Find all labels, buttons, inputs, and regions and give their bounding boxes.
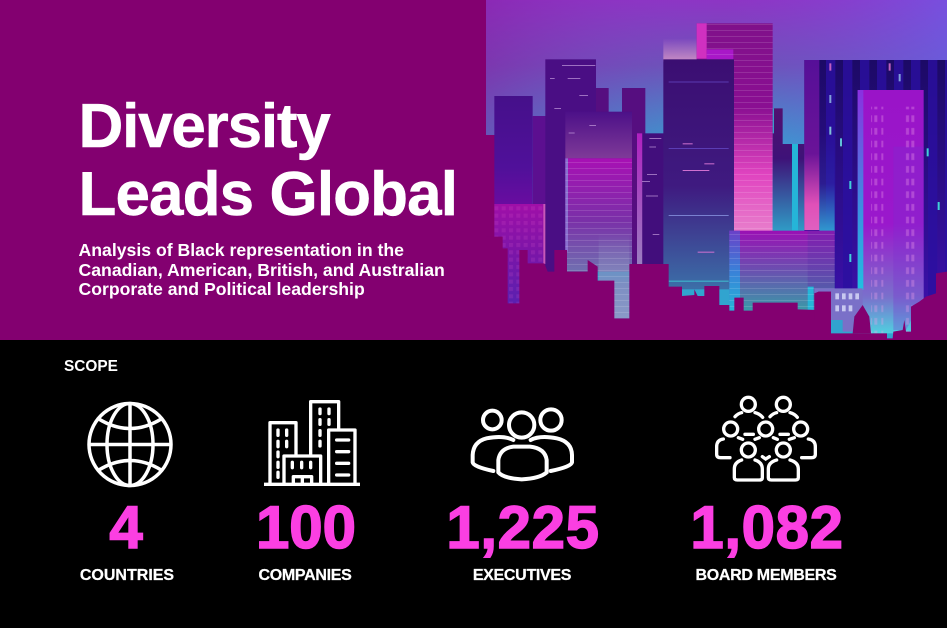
subtitle: Analysis of Black representation in the bbox=[78, 240, 404, 260]
stat: companies: 100 bbox=[256, 494, 356, 561]
icon: city buildings bbox=[264, 402, 360, 484]
icon: board members network bbox=[717, 397, 815, 480]
subtitle: Corporate and Political leadership bbox=[78, 279, 365, 299]
subtitle bbox=[78, 240, 445, 299]
title: Diversity bbox=[78, 92, 331, 161]
illustration: neon city skyline bbox=[486, 0, 947, 340]
stat: executives: 1,225 bbox=[446, 494, 600, 561]
icon: executives group bbox=[473, 409, 572, 479]
header background bbox=[0, 0, 947, 340]
stat: board members: 1,082 bbox=[690, 494, 844, 561]
stat: executives: EXECUTIVES bbox=[473, 567, 572, 584]
section heading: scope: SCOPE bbox=[64, 358, 118, 375]
stat: companies: COMPANIES bbox=[258, 567, 352, 584]
title second line: Leads Global bbox=[78, 160, 457, 229]
stat: board members: BOARD MEMBERS bbox=[696, 567, 837, 584]
icon: globe bbox=[89, 404, 171, 486]
stat: countries: 4 bbox=[109, 494, 143, 561]
stat: countries bbox=[80, 494, 174, 584]
page footer background bbox=[0, 340, 947, 628]
subtitle: Canadian, American, British, and Australian bbox=[78, 260, 445, 280]
stat: countries: COUNTRIES bbox=[80, 567, 174, 584]
